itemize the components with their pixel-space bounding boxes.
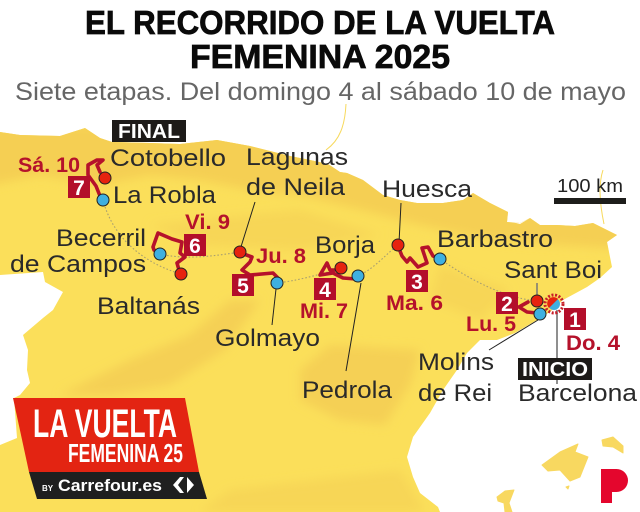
FINAL tag: FINAL (118, 121, 180, 143)
INICIO tag: INICIO (522, 359, 588, 381)
stage number badges: 7 (73, 177, 85, 200)
publisher logo (601, 469, 628, 503)
city labels: La Robla (113, 182, 217, 209)
stage dates: Sá. 10 (18, 154, 80, 177)
river lines (326, 104, 604, 224)
city labels: de Campos (10, 251, 146, 278)
city labels: de Rei (418, 380, 492, 407)
city labels: Barcelona (518, 380, 638, 407)
Balearic Islands (497, 437, 623, 512)
city labels: Pedrola (302, 377, 393, 404)
scale bar: 100 km (557, 176, 623, 196)
subtitle: Siete etapas. Del domingo 4 al sábado 10 de mayo (15, 78, 626, 106)
start marker: Barcelona (545, 295, 563, 313)
stage number badges: 2 (501, 293, 513, 316)
stage number badges: 3 (411, 271, 423, 294)
stage dates: Mi. 7 (300, 300, 348, 323)
stage dates: Ju. 8 (256, 245, 306, 268)
city labels (10, 144, 638, 407)
logo: La Vuelta Femenina 25: BY (42, 484, 54, 493)
title (85, 4, 555, 75)
city labels: Huesca (382, 176, 473, 203)
city labels: Golmayo (215, 325, 320, 352)
city labels: Barbastro (437, 226, 553, 253)
stage number badges: 6 (189, 235, 201, 258)
stage routes (88, 160, 537, 313)
logo: La Vuelta Femenina 25: LA VUELTA (33, 402, 177, 446)
title: EL RECORRIDO DE LA VUELTA (85, 4, 555, 41)
stage number badges: 4 (319, 279, 331, 302)
city labels: Lagunas (246, 144, 348, 171)
stage dates: Lu. 5 (466, 313, 516, 336)
stage markers (97, 172, 546, 320)
stage dates (18, 154, 620, 355)
stage dates: Ma. 6 (386, 292, 443, 315)
title: FEMENINA 2025 (190, 38, 450, 75)
logo: La Vuelta Femenina 25: Carrefour.es (58, 476, 162, 495)
transfer connectors (103, 200, 537, 301)
stage number badges: 1 (569, 309, 581, 332)
stage number badges: 5 (237, 275, 249, 298)
stage dates: Vi. 9 (185, 211, 230, 234)
city labels: Cotobello (110, 145, 226, 172)
logo: La Vuelta Femenina 25 (13, 398, 207, 499)
city labels: de Neila (246, 174, 346, 201)
city labels: Becerril (56, 225, 146, 252)
map of Spain (0, 120, 640, 512)
city labels: Baltanás (97, 293, 200, 320)
city labels: Borja (315, 232, 376, 259)
city labels: Sant Boi (504, 257, 602, 284)
city labels: Molins (418, 349, 494, 376)
stage number badges (68, 176, 586, 332)
leader lines (240, 202, 557, 384)
stage dates: Do. 4 (566, 332, 620, 355)
logo: La Vuelta Femenina 25: FEMENINA 25 (68, 438, 183, 468)
scale bar (554, 176, 626, 204)
